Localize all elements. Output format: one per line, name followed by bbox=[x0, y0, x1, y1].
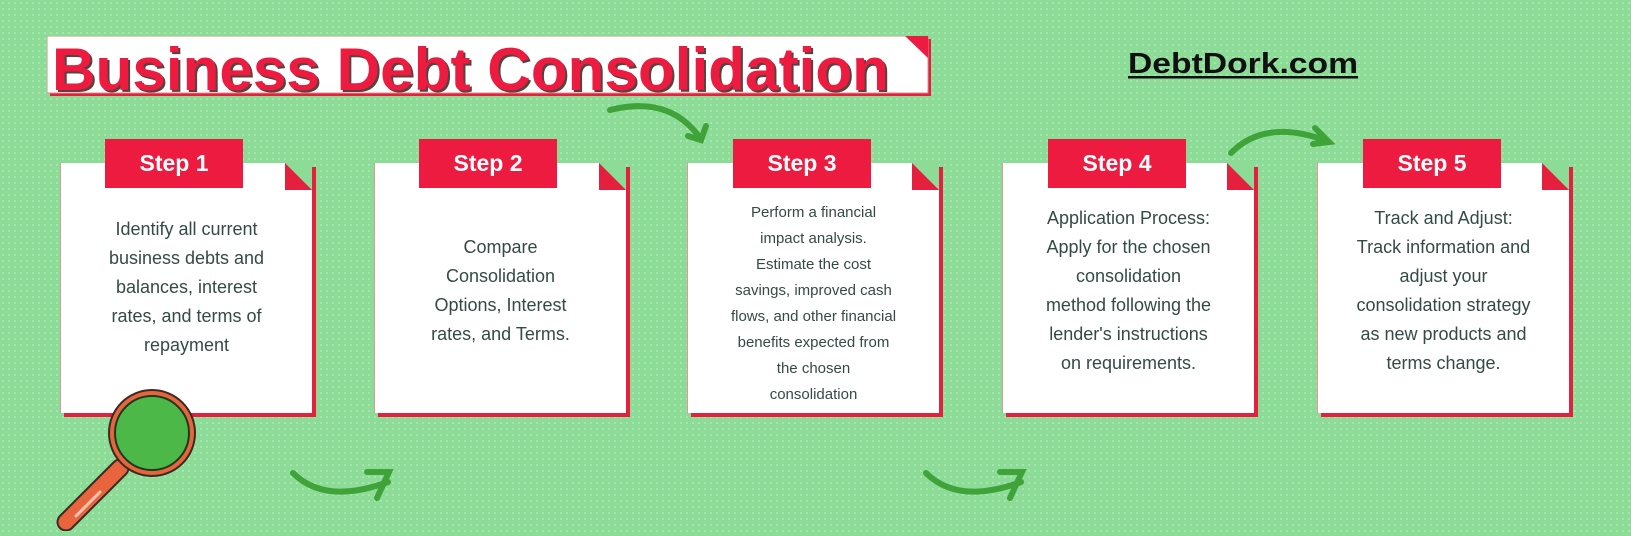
card: step 4: on requirements. bbox=[1061, 353, 1196, 373]
card: step 3: the chosen bbox=[777, 360, 850, 377]
card: step 3: benefits expected from bbox=[738, 334, 889, 351]
arrow: bottom 2 bbox=[923, 469, 1027, 501]
card: step 1 bbox=[60, 163, 312, 413]
card: step 4: lender's instructions bbox=[1049, 324, 1208, 344]
card: step 1: repayment bbox=[144, 335, 229, 355]
card: step 4: consolidation bbox=[1076, 266, 1181, 286]
card: step 5: consolidation strategy bbox=[1356, 295, 1531, 315]
card: step 5: Track information and bbox=[1357, 237, 1530, 257]
card: step 2: Consolidation bbox=[446, 266, 555, 286]
card: step 3: savings, improved cash bbox=[735, 282, 892, 299]
tab: step 3 bbox=[733, 139, 871, 188]
tab: step 2 bbox=[419, 139, 557, 188]
card: step 3 bbox=[687, 163, 939, 413]
icon: magnifying glass bbox=[56, 389, 196, 531]
card: step 4: method following the bbox=[1046, 295, 1211, 315]
tab: step 4: Step 4 bbox=[1082, 150, 1152, 176]
tab: step 1 bbox=[105, 139, 243, 188]
card: step 1: balances, interest bbox=[116, 277, 257, 297]
tab: step 5 bbox=[1363, 139, 1501, 188]
card: step 2 bbox=[374, 163, 626, 413]
card: step 3: consolidation bbox=[770, 386, 857, 403]
tab: step 1: Step 1 bbox=[139, 150, 209, 176]
card: step 4 bbox=[1002, 163, 1254, 413]
card: step 5: adjust your bbox=[1399, 266, 1488, 286]
arrow: top to step 3 bbox=[607, 103, 709, 144]
site name: DebtDork.com bbox=[1128, 48, 1358, 80]
card: step 3: Perform a financial bbox=[751, 204, 876, 221]
card: step 2: rates, and Terms. bbox=[431, 324, 570, 344]
card: step 3: Estimate the cost bbox=[756, 256, 871, 273]
card: step 5 bbox=[1317, 163, 1569, 413]
card: step 5: Track and Adjust: bbox=[1374, 208, 1513, 228]
card: step 3: impact analysis. bbox=[760, 230, 867, 247]
card: step 4: Application Process: bbox=[1047, 208, 1210, 228]
card: step 2: Compare bbox=[463, 237, 538, 257]
arrow: step 4 to 5 bbox=[1228, 125, 1336, 156]
tab: step 3: Step 3 bbox=[767, 150, 837, 176]
tab: step 5: Step 5 bbox=[1397, 150, 1467, 176]
arrow: bottom 1 bbox=[290, 469, 394, 501]
card: step 3: flows, and other financial bbox=[731, 308, 896, 325]
card: step 2: Options, Interest bbox=[434, 295, 567, 315]
card: step 5: as new products and bbox=[1360, 324, 1527, 344]
card: step 1: Identify all current bbox=[115, 219, 258, 239]
card: step 5: terms change. bbox=[1386, 353, 1501, 373]
card: step 1: business debts and bbox=[109, 248, 264, 268]
tab: step 2: Step 2 bbox=[453, 150, 523, 176]
card: step 4: Apply for the chosen bbox=[1046, 237, 1211, 257]
tab: step 4 bbox=[1048, 139, 1186, 188]
card: step 1: rates, and terms of bbox=[111, 306, 262, 326]
